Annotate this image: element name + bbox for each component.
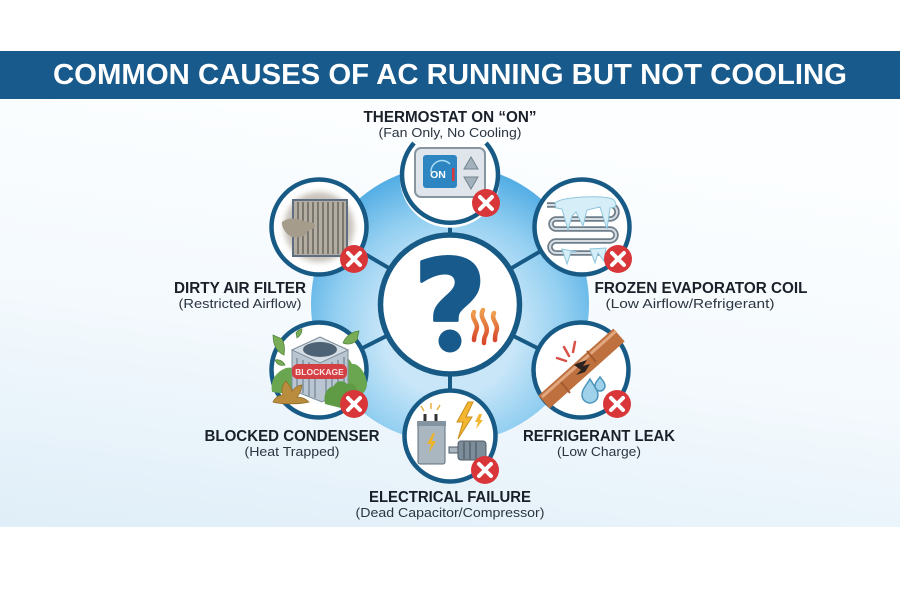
label: refrigerant leak xyxy=(523,428,676,459)
icon: leaking copper pipe xyxy=(542,331,619,403)
label: refrigerant leak: REFRIGERANT LEAK xyxy=(523,428,676,445)
icon: x badge xyxy=(340,390,368,418)
question mark icon xyxy=(420,255,480,352)
panel: electrical failure xyxy=(404,390,499,484)
label: thermostat: THERMOSTAT ON “ON” xyxy=(364,109,536,126)
icon: x badge xyxy=(340,245,368,273)
icon: x badge xyxy=(604,245,632,273)
label: dirty air filter: DIRTY AIR FILTER xyxy=(174,280,306,297)
icon: x badge xyxy=(472,189,500,217)
label: frozen evaporator coil: FROZEN EVAPORATOR COIL xyxy=(594,280,808,297)
label: thermostat: (Fan Only, No Cooling) xyxy=(378,125,522,140)
panel: blocked condenser xyxy=(272,322,368,418)
center question mark circle xyxy=(380,234,520,383)
blockage tag: BLOCKAGE xyxy=(295,367,344,377)
question mark icon: ? xyxy=(413,234,487,383)
label: blocked condenser xyxy=(204,428,380,459)
label: electrical failure xyxy=(356,489,544,520)
label: blocked condenser: BLOCKED CONDENSER xyxy=(204,428,380,445)
icon: thermostat: ON xyxy=(430,169,446,181)
label: blocked condenser: (Heat Trapped) xyxy=(244,444,340,459)
panel: refrigerant leak xyxy=(534,322,631,418)
label: dirty air filter: (Restricted Airflow) xyxy=(178,296,302,311)
icon: capacitor and motor xyxy=(417,402,486,464)
label: dirty air filter xyxy=(174,280,306,311)
label: electrical failure: ELECTRICAL FAILURE xyxy=(369,489,531,506)
bushes behind unit xyxy=(272,368,296,395)
heat waves icon xyxy=(473,310,497,343)
panel: frozen evaporator coil xyxy=(534,180,632,274)
icon: dirty filter xyxy=(282,192,354,262)
panel: thermostat xyxy=(400,143,500,228)
icon: frozen coil xyxy=(547,197,617,264)
background panel xyxy=(0,99,900,527)
icon: x badge xyxy=(471,456,499,484)
central diagram hub ring xyxy=(311,165,589,443)
label: refrigerant leak: (Low Charge) xyxy=(557,444,641,459)
title banner xyxy=(0,51,900,99)
title banner: COMMON CAUSES OF AC RUNNING BUT NOT COOLING xyxy=(53,59,847,91)
label: electrical failure: (Dead Capacitor/Compressor) xyxy=(356,505,544,520)
label: thermostat xyxy=(364,109,536,140)
panel: dirty air filter xyxy=(272,180,368,274)
icon: x badge xyxy=(603,390,631,418)
label: frozen evaporator coil: (Low Airflow/Refrigerant) xyxy=(606,296,774,311)
label: frozen evaporator coil xyxy=(594,280,808,311)
